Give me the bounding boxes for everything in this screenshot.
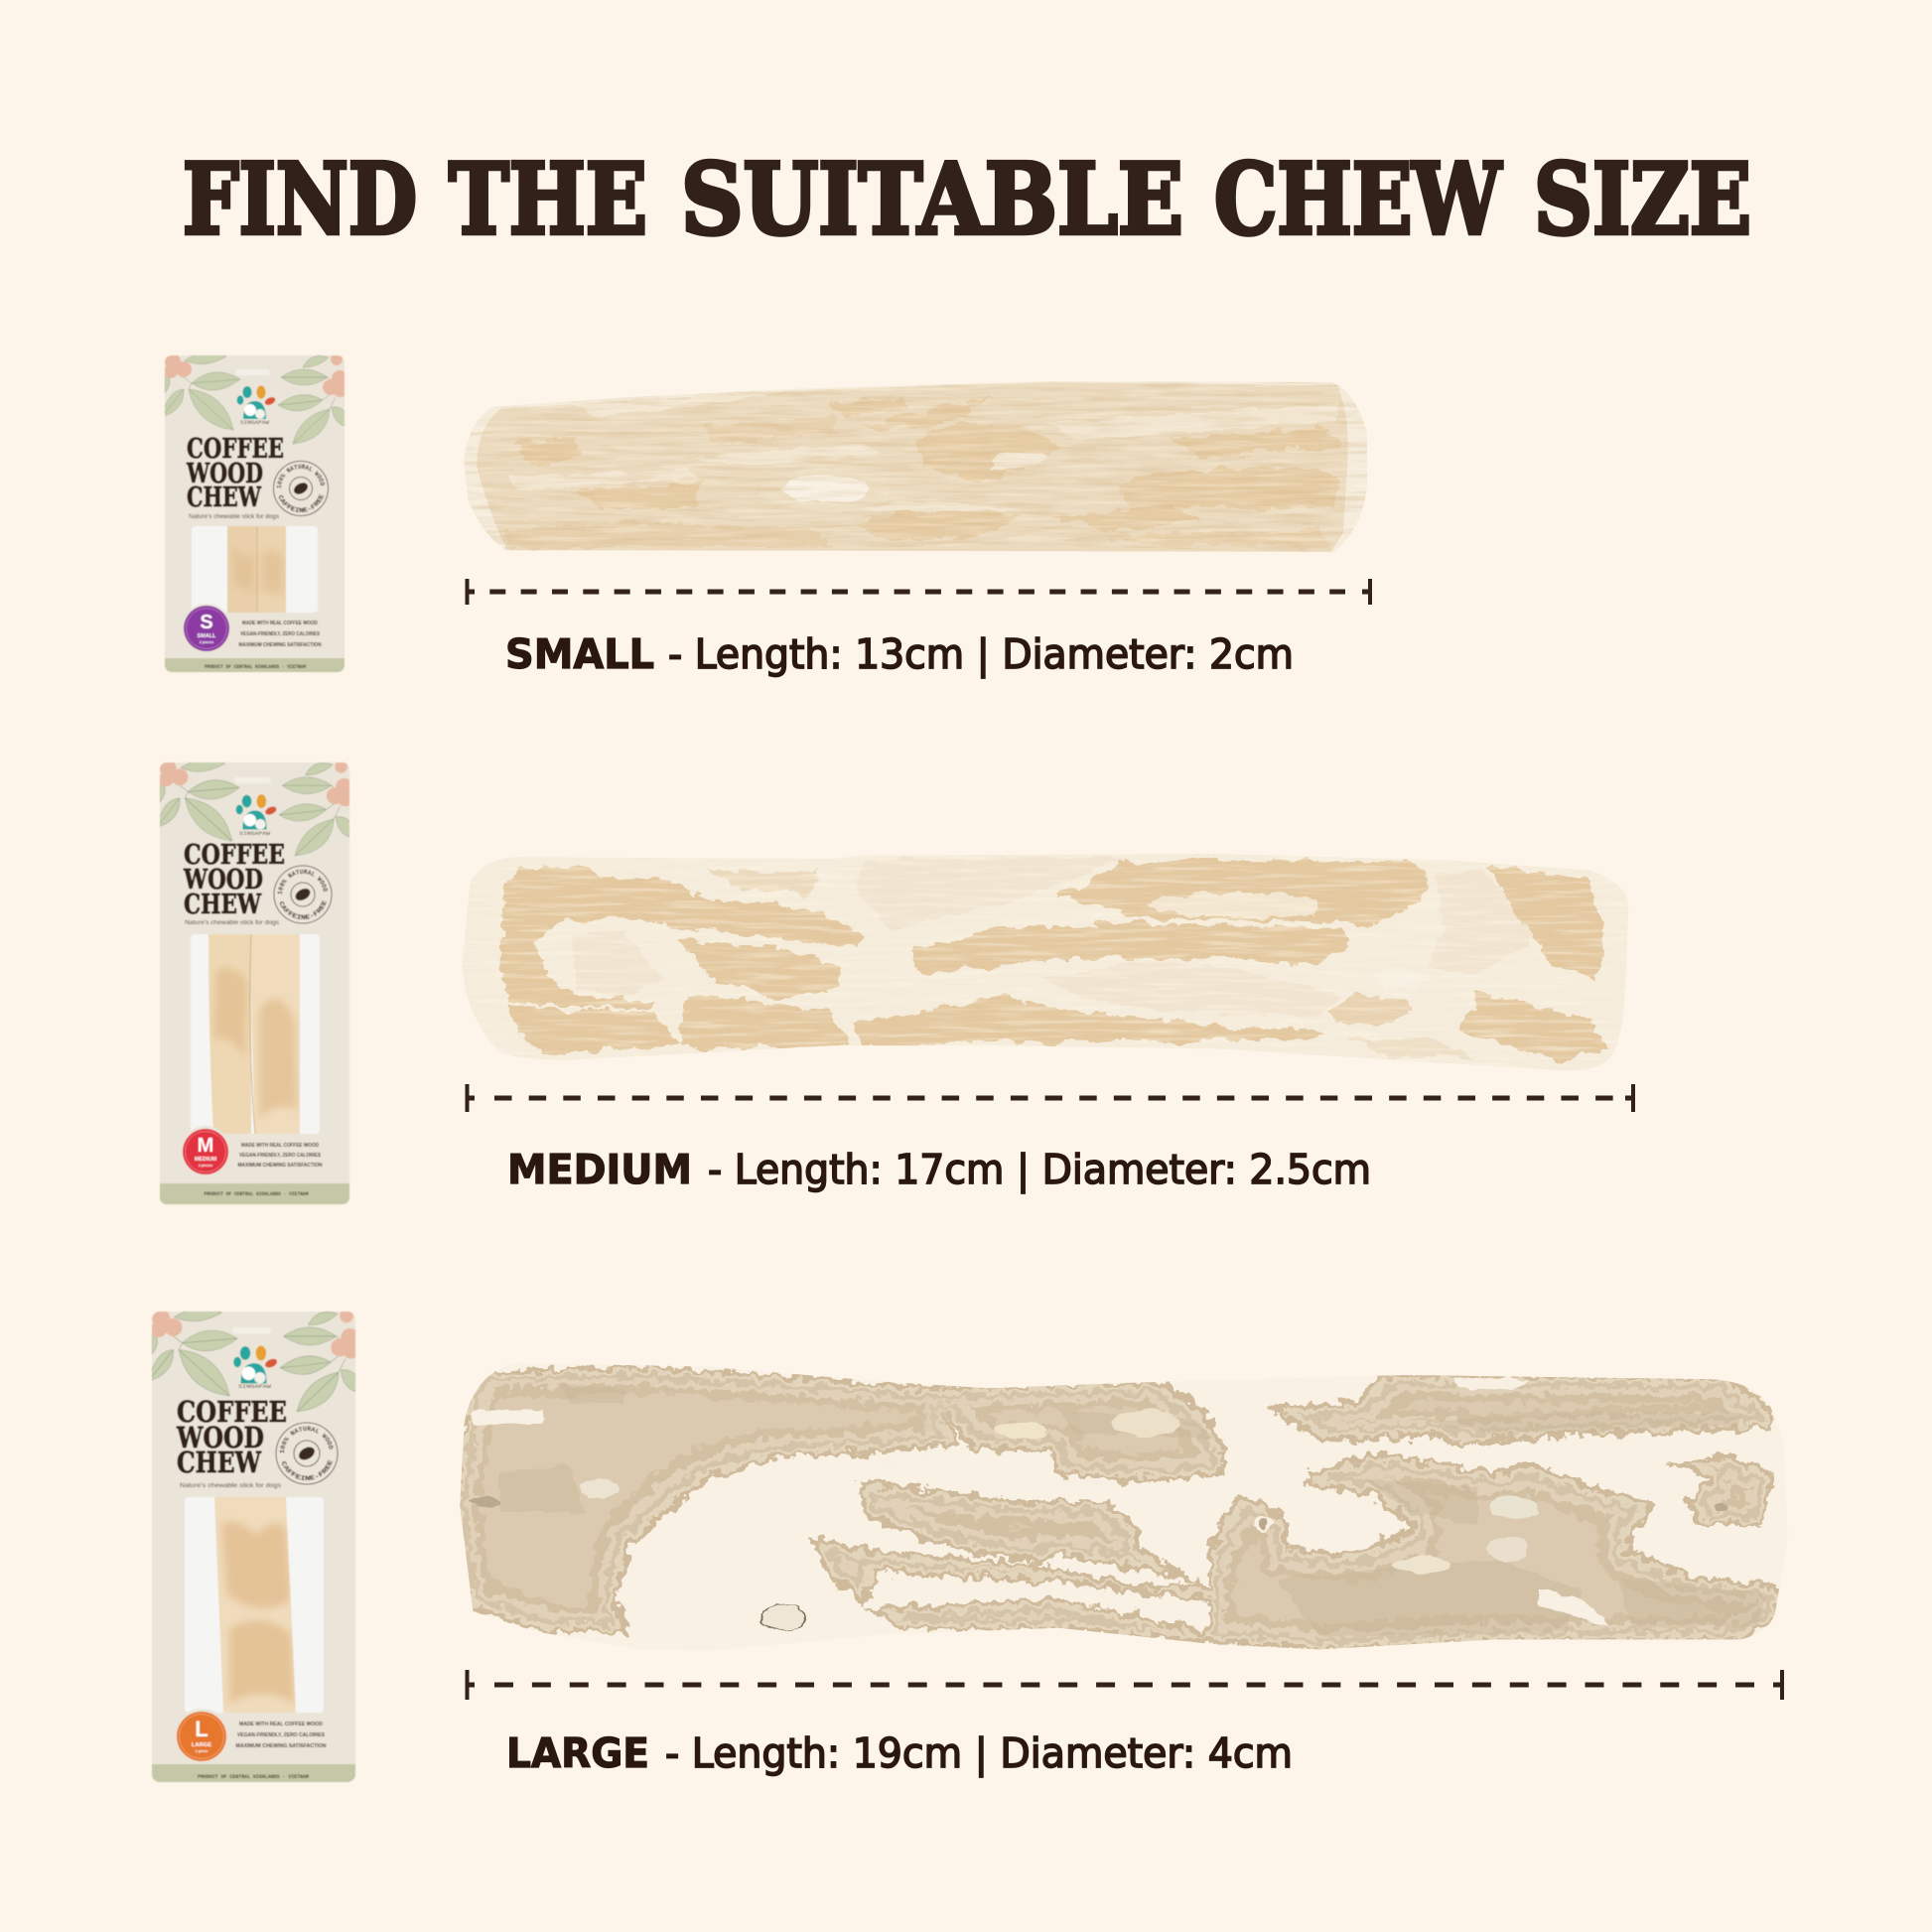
product package: large: SINGAPAW	[238, 1384, 271, 1390]
title: SUITABLE	[681, 143, 1183, 257]
title: SIZE	[1534, 143, 1751, 257]
package name: WOOD	[183, 865, 263, 896]
product package: small: SINGAPAW	[240, 420, 269, 426]
claims: VEGAN-FRIENDLY, ZERO CALORIES	[240, 631, 321, 637]
claims: VEGAN-FRIENDLY, ZERO CALORIES	[239, 1153, 322, 1159]
package name: CHEW	[177, 1446, 261, 1479]
stamp: natural wood: CAFFEINE-FREE	[278, 493, 324, 512]
stamp: natural wood: 100% NATURAL WOOD	[276, 464, 326, 488]
package name: COFFEE	[187, 434, 284, 465]
claims	[238, 621, 322, 648]
size badge S: S	[200, 612, 213, 633]
title	[183, 143, 1751, 257]
product package: small	[165, 355, 345, 673]
claims	[238, 1143, 323, 1169]
package name	[186, 434, 284, 513]
product package: medium: SINGAPAW	[239, 831, 270, 837]
dimension line: small	[467, 579, 1370, 605]
size badge L: L	[195, 1717, 208, 1741]
claims: MADE WITH REAL COFFEE WOOD	[239, 1722, 323, 1727]
size badge M: M	[198, 1135, 213, 1157]
claims: MAXIMUM CHEWING SATISFACTION	[236, 1743, 327, 1749]
size badge L: 1 piece	[196, 1749, 207, 1753]
size badge L: LARGE	[192, 1742, 211, 1748]
size badge M: MEDIUM	[195, 1157, 217, 1163]
stamp: natural wood	[274, 866, 332, 923]
size badge M	[180, 1126, 231, 1177]
package name: WOOD	[176, 1421, 264, 1454]
title: CHEW	[1214, 143, 1503, 257]
product package: medium: Nature's chewable stick for dogs	[185, 919, 280, 926]
stamp: natural wood: CAFFEINE-FREE	[282, 1459, 334, 1481]
product package: medium	[159, 762, 349, 1205]
package name	[176, 1395, 287, 1479]
claims: VEGAN-FRIENDLY, ZERO CALORIES	[237, 1732, 326, 1738]
clear window with sticks	[191, 934, 320, 1134]
package name	[183, 840, 285, 920]
package name: COFFEE	[184, 840, 285, 871]
dimension line: medium	[467, 1084, 1633, 1112]
stamp: natural wood	[276, 1423, 338, 1484]
claims: MADE WITH REAL COFFEE WOOD	[241, 1143, 319, 1149]
claims: MAXIMUM CHEWING SATISFACTION	[238, 1163, 323, 1169]
chew stick: small	[457, 377, 1375, 561]
package name: CHEW	[184, 890, 262, 920]
size badge S	[182, 604, 231, 653]
claims: MADE WITH REAL COFFEE WOOD	[242, 621, 318, 626]
title: THE	[449, 143, 647, 257]
claims	[236, 1722, 327, 1749]
label: small: SMALL	[505, 630, 654, 678]
size badge L	[174, 1709, 229, 1764]
claims: MAXIMUM CHEWING SATISFACTION	[238, 642, 322, 648]
product package: large: PRODUCT OF CENTRAL HIGHLANDS · VIETNAM	[198, 1773, 310, 1780]
stamp: natural wood: CAFFEINE-FREE	[279, 899, 328, 919]
clear window with sticks	[192, 526, 318, 613]
size badge M: 2 pieces	[199, 1164, 212, 1168]
stamp: natural wood: 100% NATURAL WOOD	[279, 1426, 334, 1453]
chew stick: large	[451, 1363, 1788, 1653]
product package: medium: PRODUCT OF CENTRAL HIGHLANDS · VIETNAM	[205, 1190, 309, 1197]
label: medium: - Length: 17cm | Diameter: 2.5cm	[708, 1146, 1371, 1193]
product package: large: Nature's chewable stick for dogs	[180, 1482, 282, 1489]
title: FIND	[183, 143, 417, 257]
size badge S: 2 pieces	[200, 640, 213, 644]
product package: small: Nature's chewable stick for dogs	[189, 513, 280, 520]
package name: COFFEE	[177, 1395, 287, 1429]
product package: large	[151, 1311, 355, 1783]
dimension line: large	[467, 1670, 1782, 1700]
stamp: natural wood	[274, 461, 328, 516]
package name: CHEW	[187, 483, 262, 513]
chew stick: medium	[457, 844, 1638, 1077]
label: large: LARGE	[506, 1729, 649, 1777]
label: small: - Length: 13cm | Diameter: 2cm	[668, 630, 1294, 678]
label: medium: MEDIUM	[507, 1146, 692, 1193]
label: large: - Length: 19cm | Diameter: 4cm	[665, 1729, 1293, 1777]
size badge S: SMALL	[198, 633, 216, 639]
stamp: natural wood: 100% NATURAL WOOD	[277, 869, 328, 896]
product package: small: PRODUCT OF CENTRAL HIGHLANDS · VIETNAM	[205, 663, 307, 670]
package name: WOOD	[186, 459, 263, 489]
clear window with stick	[185, 1497, 324, 1713]
